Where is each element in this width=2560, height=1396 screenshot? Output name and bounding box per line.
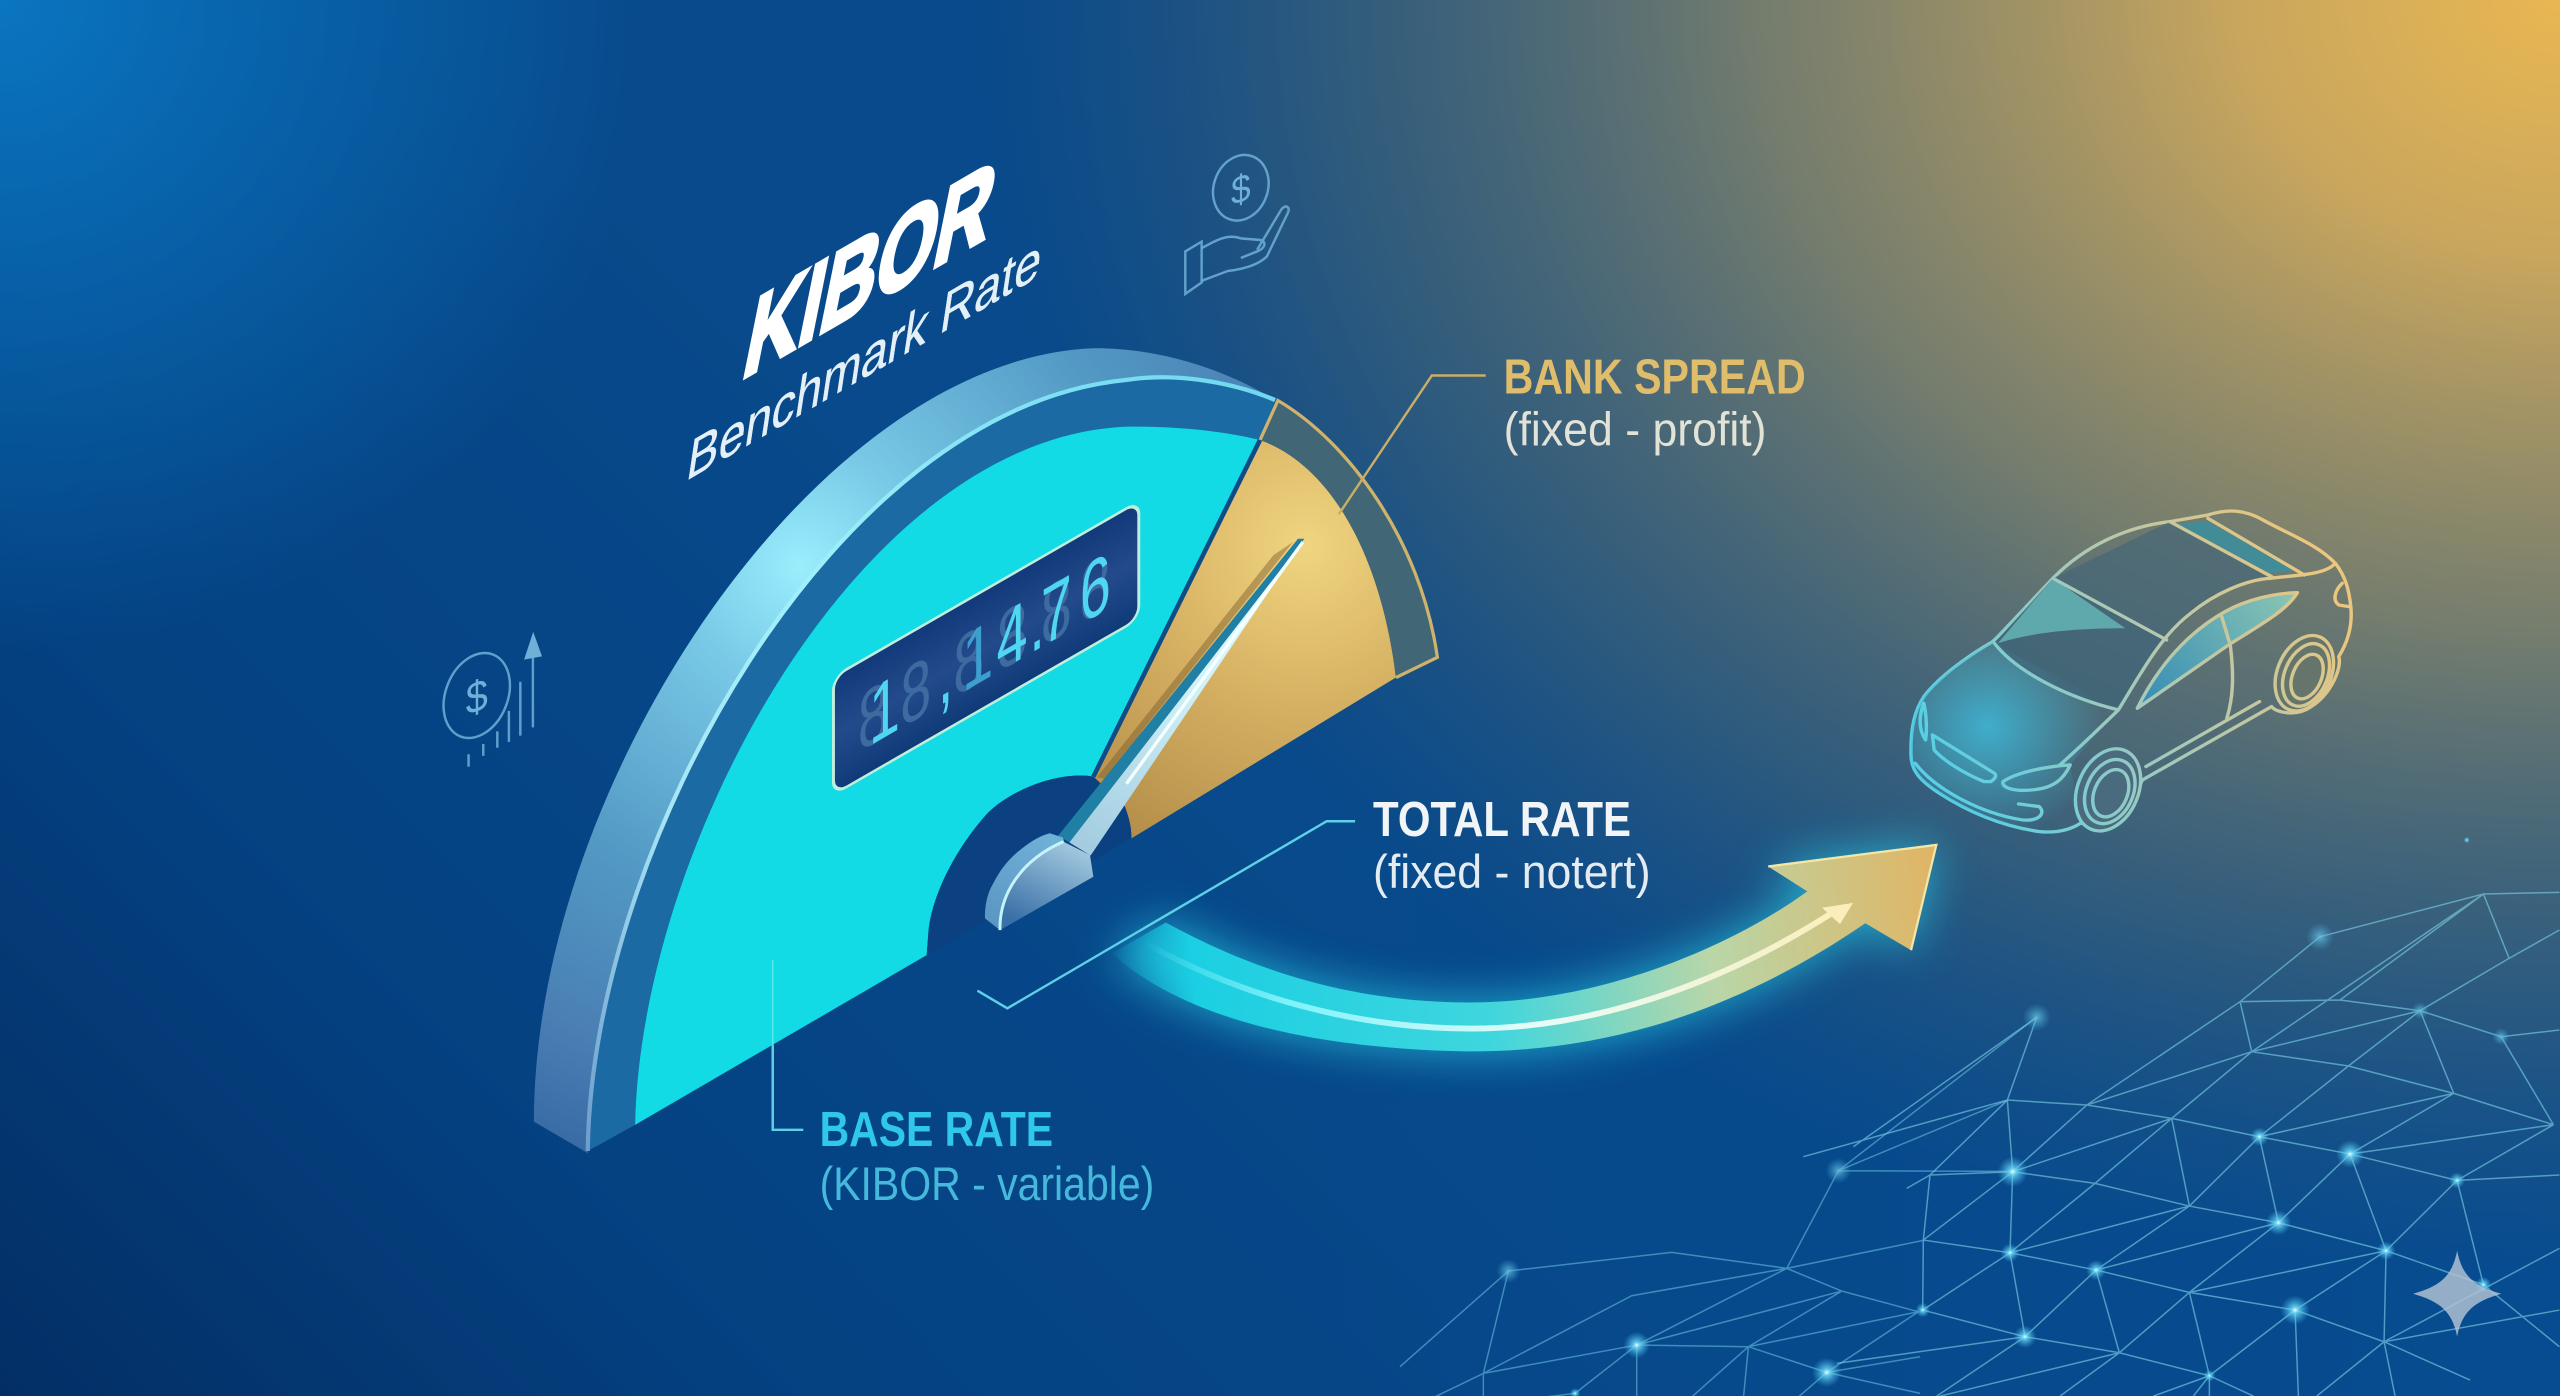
bank spread outline	[1260, 400, 1437, 678]
icon: sparkle watermark	[2413, 1251, 2501, 1336]
subtitle: Benchmark Rate: Benchmark Rate	[683, 224, 1046, 495]
gauge ring highlight	[588, 377, 1275, 1151]
label: bank spread note: (fixed - profit)	[1504, 404, 1767, 457]
label: total rate: TOTAL RATE	[1373, 793, 1631, 847]
network nodes	[1915, 837, 2510, 1382]
callout: base rate	[773, 960, 1154, 1211]
needle knob	[985, 833, 1093, 930]
needle	[985, 539, 1304, 930]
digital display	[833, 501, 1139, 794]
label: base rate: BASE RATE	[820, 1103, 1053, 1157]
bank spread segment	[1093, 440, 1396, 838]
display digits, lit: 1,14.76	[869, 534, 1111, 764]
icon: hand holding dollar	[1185, 147, 1289, 294]
icon: hand holding dollar: $	[1231, 164, 1251, 215]
mesh right part	[1803, 892, 2559, 1396]
icon: dollar with growth bars: $	[466, 669, 488, 726]
network nodes left	[1496, 1158, 1851, 1396]
icon: dollar with growth bars	[431, 632, 542, 767]
display panel	[833, 501, 1139, 794]
title: KIBOR: KIBOR	[735, 133, 1006, 406]
display digits, unlit: 888888	[858, 534, 1111, 770]
gauge	[534, 348, 1437, 1153]
callout: total rate	[977, 793, 1651, 1008]
arrow to car	[1112, 845, 1936, 1051]
base rate segment	[635, 427, 1260, 1125]
label: total rate note: (fixed - notert)	[1373, 846, 1651, 899]
label: base rate note: (KIBOR - variable)	[820, 1158, 1154, 1211]
gauge hub	[927, 775, 1131, 955]
callout: bank spread	[1339, 350, 1806, 514]
segment divider	[1093, 439, 1260, 777]
gauge front ring	[588, 377, 1275, 1151]
gauge side wall	[534, 348, 1275, 1153]
bank spread outer band	[1260, 400, 1437, 678]
mesh left part	[1400, 1017, 2037, 1396]
label: bank spread: BANK SPREAD	[1504, 350, 1806, 404]
car outline	[1911, 511, 2351, 840]
network mesh	[1400, 892, 2559, 1396]
